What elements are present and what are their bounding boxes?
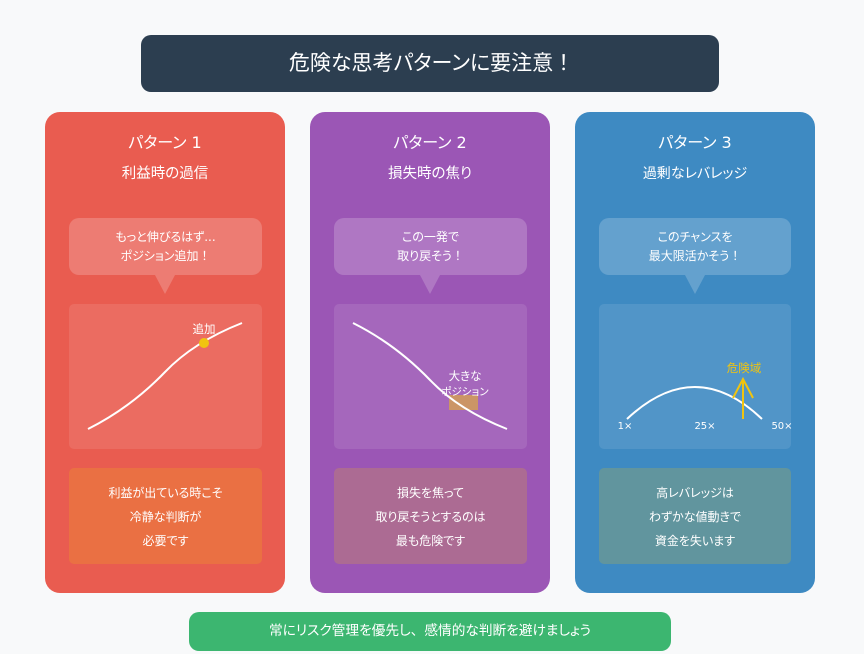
panel: pattern 1 bbox=[45, 112, 285, 593]
advice note: pattern 1: 冷静な判断が bbox=[130, 510, 201, 524]
chart: falling curve with large position: 大きな bbox=[449, 369, 481, 383]
footer message: 常にリスク管理を優先し、感情的な判断を避けましょう bbox=[269, 623, 591, 639]
panel: pattern 3 bbox=[575, 112, 815, 593]
advice note: pattern 2 bbox=[334, 468, 527, 564]
heading: pattern 2: パターン 2 bbox=[393, 133, 467, 152]
advice note: pattern 1 bbox=[69, 468, 262, 564]
advice note: pattern 3: 資金を失います bbox=[655, 534, 735, 548]
speech bubble: pattern 2 bbox=[334, 218, 527, 294]
subheading: pattern 1: 利益時の過信 bbox=[122, 166, 208, 182]
speech bubble: pattern 2: この一発で bbox=[402, 230, 459, 244]
chart: leverage arc with danger zone bbox=[599, 304, 791, 449]
heading: pattern 1: パターン 1 bbox=[128, 133, 202, 152]
speech bubble: pattern 2: 取り戻そう！ bbox=[397, 249, 464, 263]
subheading: pattern 2: 損失時の焦り bbox=[388, 166, 472, 182]
speech bubble: pattern 1: ポジション追加！ bbox=[120, 249, 210, 263]
chart: rising curve with add point: 追加 bbox=[192, 322, 216, 336]
advice note: pattern 1: 利益が出ている時こそ bbox=[108, 486, 223, 500]
chart: leverage arc with danger zone: 危険域 bbox=[727, 361, 762, 375]
subheading: pattern 3: 過剰なレバレッジ bbox=[643, 166, 747, 182]
speech bubble: pattern 1: もっと伸びるはず... bbox=[115, 230, 216, 244]
speech bubble: pattern 1 bbox=[69, 218, 262, 294]
speech bubble: pattern 3 bbox=[599, 218, 791, 294]
chart: leverage arc with danger zone: 50× bbox=[771, 421, 793, 432]
advice note: pattern 3 bbox=[599, 468, 791, 564]
speech bubble: pattern 3: 最大限活かそう！ bbox=[649, 249, 741, 263]
chart: leverage arc with danger zone: 25× bbox=[694, 421, 716, 432]
heading: pattern 3: パターン 3 bbox=[658, 133, 732, 152]
advice note: pattern 2: 損失を焦って bbox=[397, 486, 464, 500]
chart: falling curve with large position: ポジション bbox=[441, 386, 489, 398]
advice note: pattern 2: 取り戻そうとするのは bbox=[375, 510, 486, 524]
advice note: pattern 1: 必要です bbox=[143, 534, 188, 548]
title bbox=[141, 35, 719, 92]
chart: falling curve with large position bbox=[334, 304, 527, 449]
advice note: pattern 2: 最も危険です bbox=[396, 534, 465, 548]
advice note: pattern 3: わずかな値動きで bbox=[649, 510, 741, 524]
speech bubble: pattern 3: このチャンスを bbox=[658, 230, 732, 244]
title: 危険な思考パターンに要注意！ bbox=[289, 51, 574, 75]
chart: rising curve with add point bbox=[69, 304, 262, 449]
footer message bbox=[189, 612, 671, 651]
panel: pattern 2 bbox=[310, 112, 550, 593]
advice note: pattern 3: 高レバレッジは bbox=[656, 486, 734, 500]
chart: leverage arc with danger zone: 1× bbox=[618, 421, 632, 432]
